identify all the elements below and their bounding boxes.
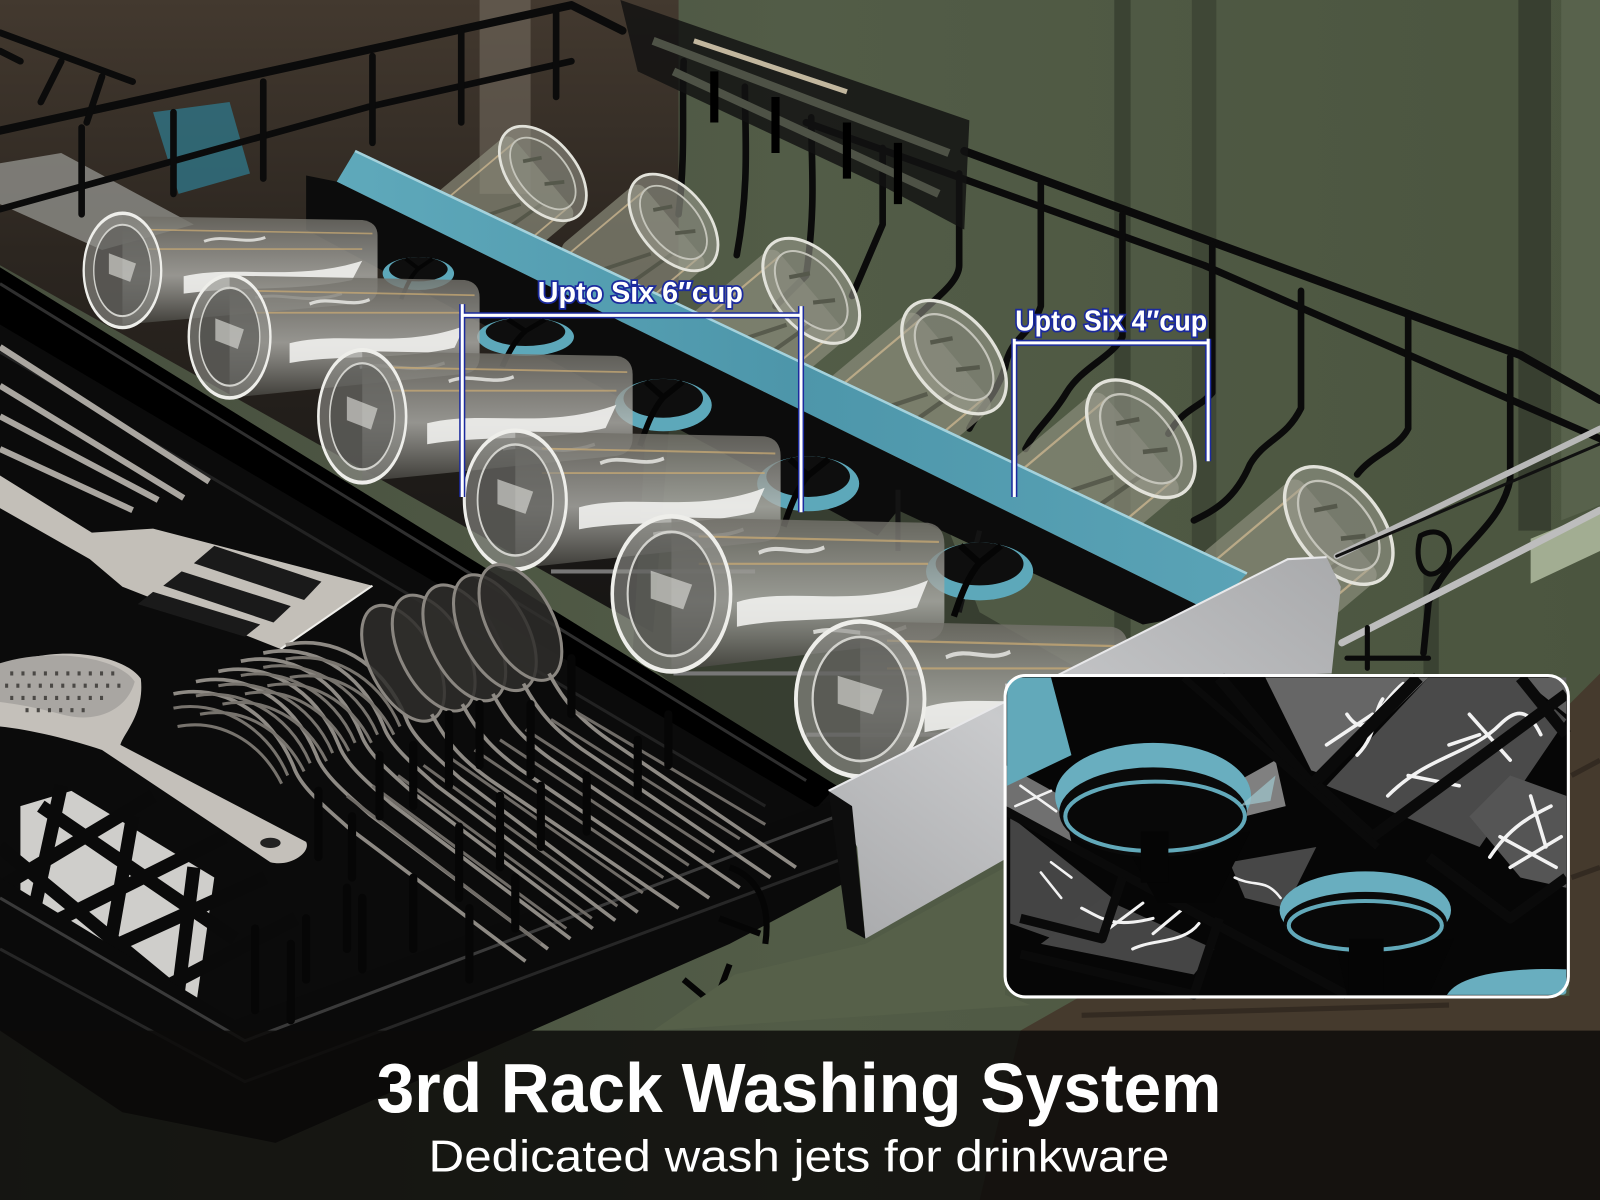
subtitle: Dedicated wash jets for drinkware <box>429 1130 1169 1181</box>
title: 3rd Rack Washing System <box>377 1049 1221 1127</box>
inset jet stem: upper <box>1128 832 1250 903</box>
rack clip assembly <box>620 0 969 230</box>
inset black rack frames <box>1006 678 1566 995</box>
label: Upto Six 6 inch cup: Upto Six 6″cup <box>538 277 743 309</box>
bracket: six 4 inch cups <box>1014 339 1208 497</box>
upper rack wires <box>0 5 1600 653</box>
upper row cups <box>429 110 1414 660</box>
forks <box>173 643 638 961</box>
steel handle <box>829 557 1341 939</box>
lower row cups <box>84 213 1128 777</box>
rack front rail <box>0 801 857 1143</box>
teal wash bar <box>337 151 1247 612</box>
black support below teal bar <box>306 176 1212 624</box>
dish rack lower left <box>0 786 296 1051</box>
inset water patches <box>1006 678 1566 974</box>
green lower cabinet <box>653 867 1031 1031</box>
inset: wash jet close-up <box>1005 676 1568 997</box>
lower rack rails <box>551 490 1020 735</box>
rack side rails <box>1337 429 1600 668</box>
tray pegs <box>255 658 668 1020</box>
spoons <box>345 551 796 908</box>
slotted spoon <box>0 654 307 863</box>
label: Upto Six 4 inch cup: Upto Six 4″cup <box>1015 306 1207 338</box>
inset white spray <box>1015 684 1561 949</box>
background: wood floor <box>980 673 1600 1200</box>
spatula <box>0 476 372 649</box>
cutlery handle highlights <box>347 709 765 944</box>
bracket: six 6 inch cups <box>462 304 801 512</box>
inset jet ring: lower <box>1280 871 1451 995</box>
cutlery tray <box>0 267 852 1061</box>
inset jet stem: lower <box>1337 939 1454 995</box>
knives <box>0 347 209 510</box>
caption bar <box>0 1031 1600 1200</box>
inset teal bar end <box>1007 678 1071 786</box>
inset jet ring: upper <box>1055 743 1276 883</box>
inset jet ring: partial <box>1447 969 1566 995</box>
dishwasher interior <box>0 0 1122 796</box>
inset white frame <box>1005 676 1568 997</box>
wash jets <box>383 257 1033 616</box>
